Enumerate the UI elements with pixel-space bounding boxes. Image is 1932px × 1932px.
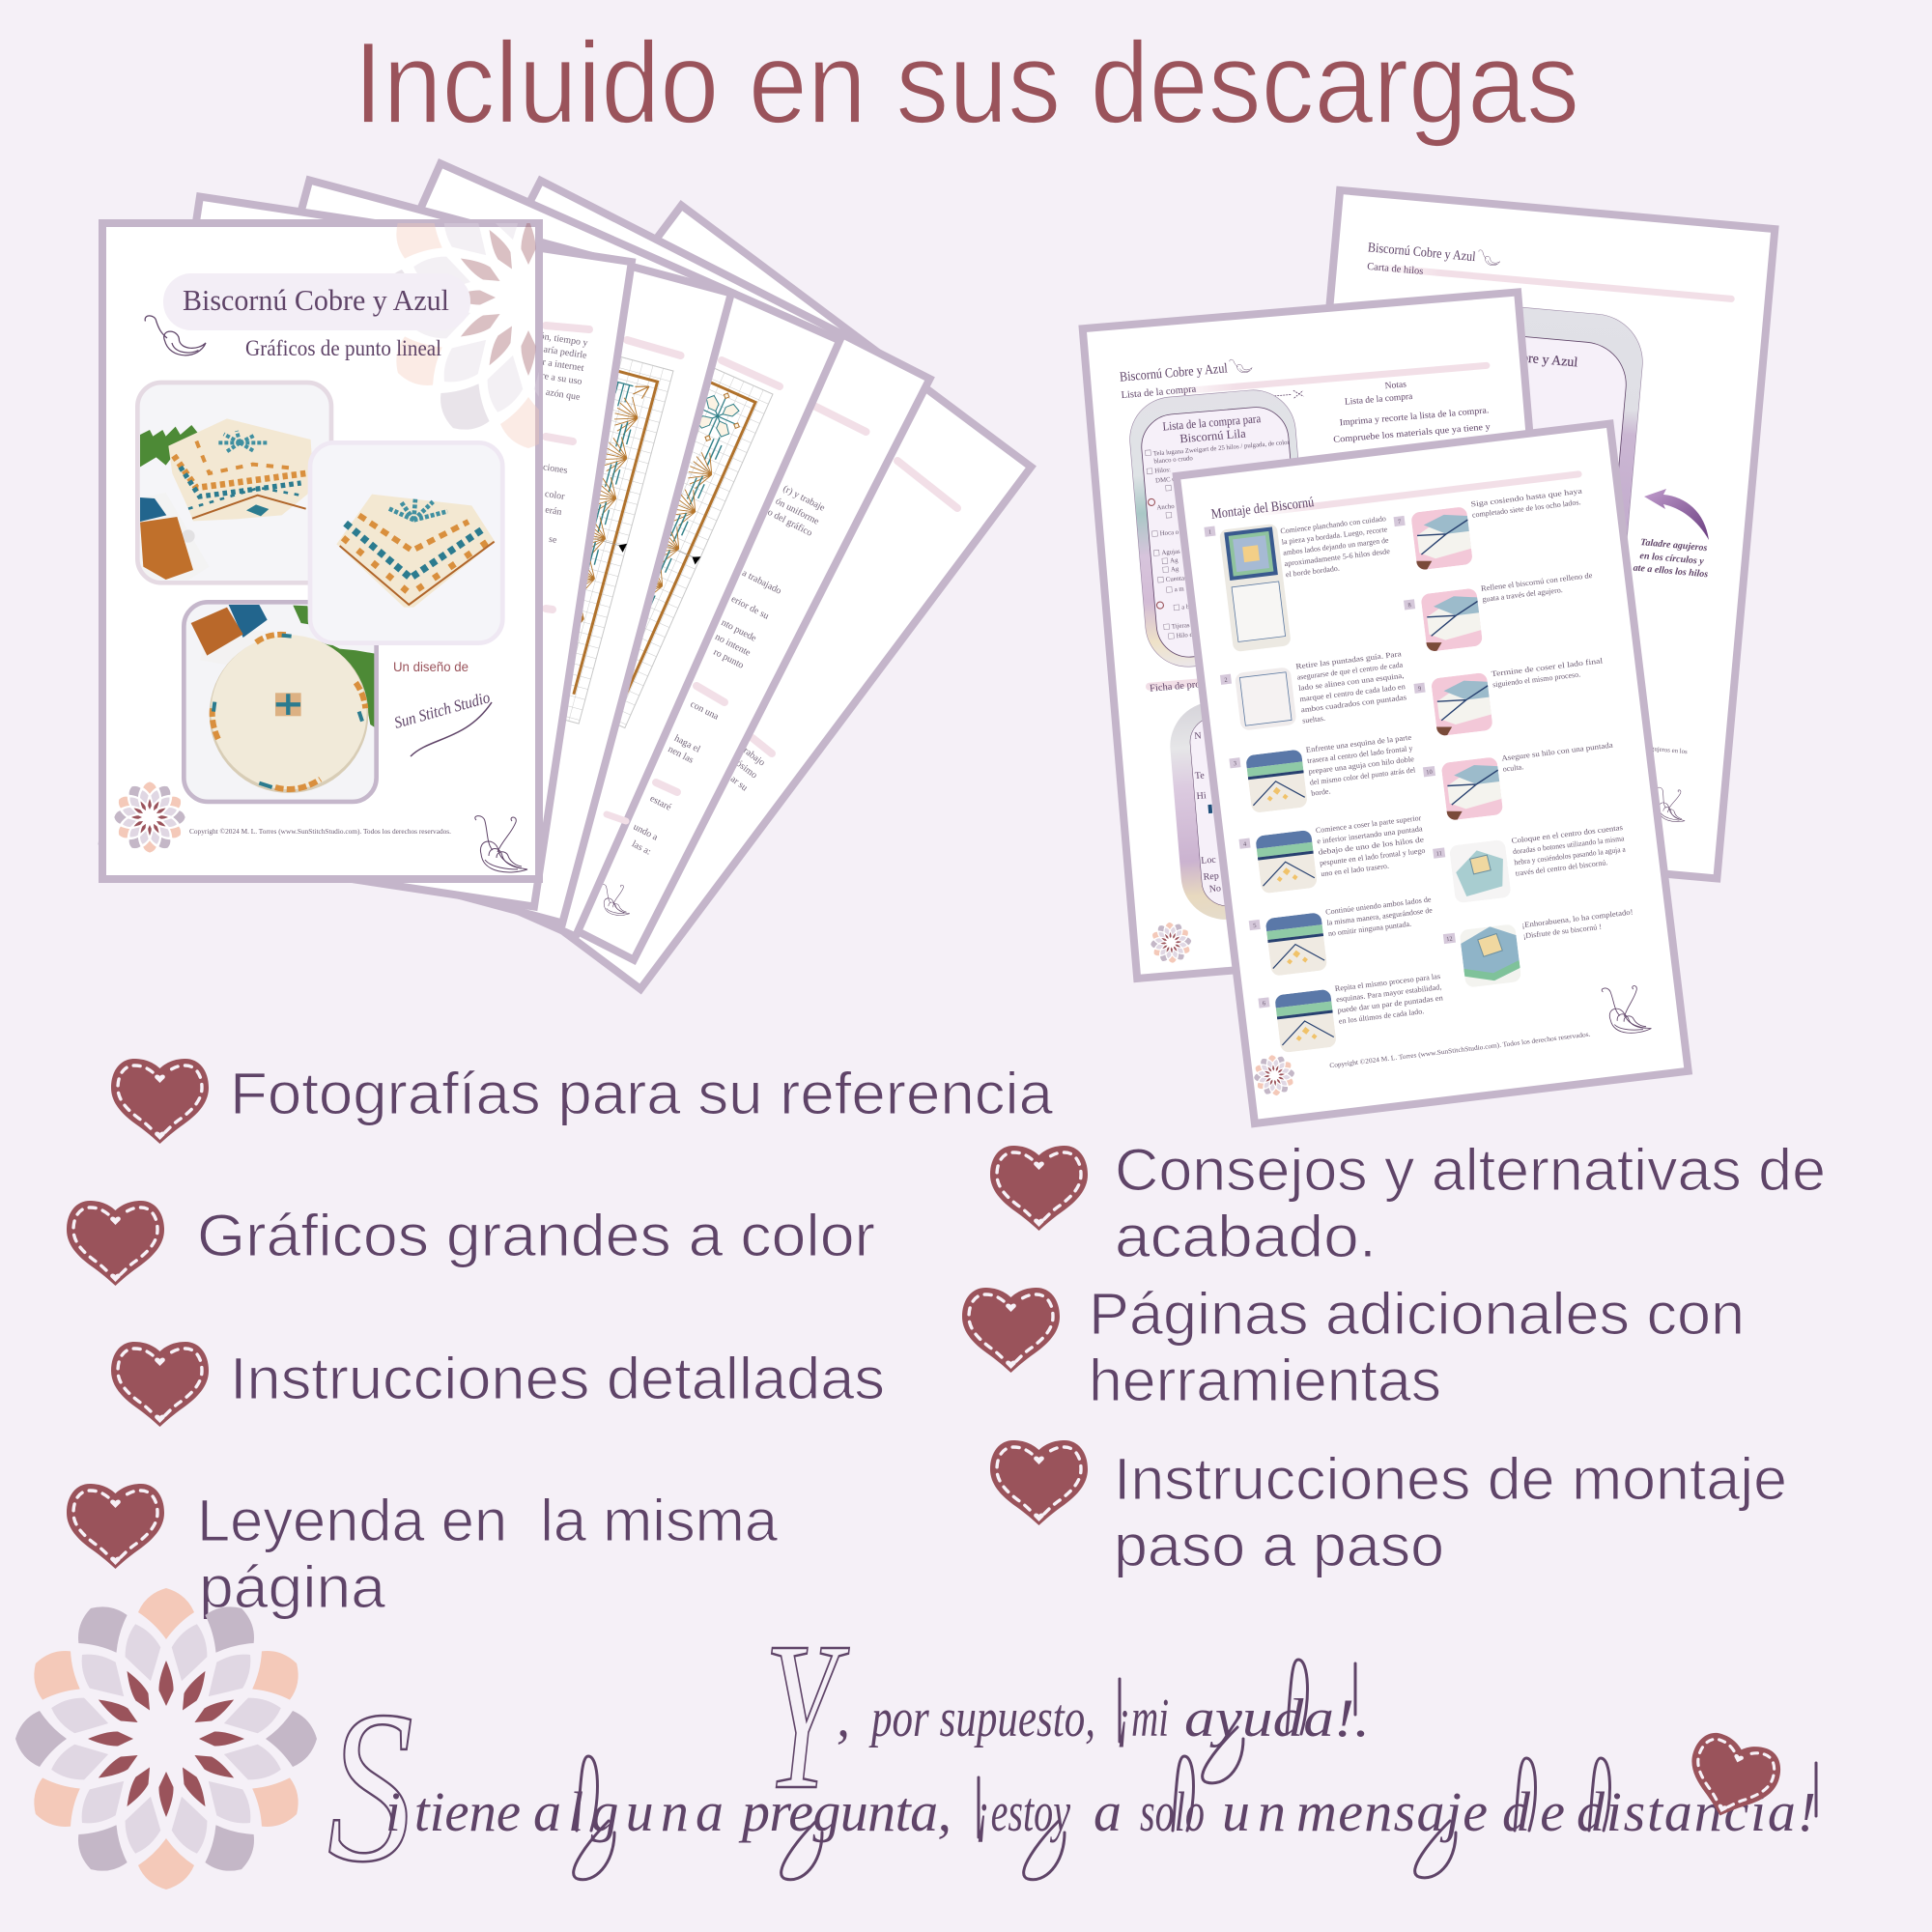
- bullet: gráficos: Gráficos grandes a color: [197, 1203, 875, 1268]
- step 6: 6: [1263, 1000, 1266, 1008]
- shopping card: [1126, 386, 1315, 670]
- step 8: guata a través del agujero.: [1482, 585, 1563, 604]
- step 11: hebra y cosiéndolos pasando la aguja a: [1514, 844, 1627, 867]
- bullet: fotografías: [111, 1059, 1053, 1144]
- decorative calligraphic flourishes: [574, 1660, 1816, 1880]
- notes: Compruebe los materials que ya tiene y: [1333, 422, 1491, 445]
- step 11: doradas o botones utilizando la misma: [1513, 834, 1625, 856]
- page B: fan text page: estaré: [648, 793, 673, 813]
- icon: feather: [1230, 357, 1252, 374]
- bullet: leyenda: [67, 1484, 778, 1620]
- step 2: 2: [1224, 677, 1228, 684]
- page title: Biscornú Cobre y Azul: [1367, 241, 1476, 265]
- step 8: 8: [1407, 602, 1411, 610]
- line 1: ayuda!.: [1184, 1689, 1370, 1748]
- step 6: Repita el mismo proceso para las: [1334, 972, 1441, 993]
- step 1: Comience planchando con cuidado: [1280, 514, 1386, 535]
- line 2: un: [1222, 1780, 1286, 1843]
- step 5: no omitir ninguna puntada.: [1327, 920, 1411, 938]
- pink rule: [1255, 470, 1582, 517]
- page B: fan text page: o del gráfico: [766, 507, 814, 539]
- page B: fan text page: [244, 181, 929, 960]
- step 3: del mismo color del punto atrás del: [1309, 765, 1416, 787]
- step 8: Rellene el biscornú con relleno de: [1481, 571, 1593, 593]
- bullet: montaje: paso a paso: [1114, 1513, 1444, 1578]
- photo 2: biscornu pentagon: [310, 442, 502, 643]
- bullet: páginas: herramientas: [1089, 1348, 1441, 1413]
- icon: feather: [1478, 250, 1501, 266]
- fanned pages group: [102, 147, 1031, 989]
- copyright: Copyright ©2024 M. L. Torres (www.SunStitchStudio.com). Todos los derechos reservados.: [1329, 1031, 1591, 1069]
- shopping card: Biscornú Lila: [1179, 426, 1247, 445]
- page E: text page: color: [544, 489, 566, 502]
- step 8: [1403, 571, 1600, 654]
- small mandala: [114, 781, 185, 853]
- step 3: 3: [1234, 760, 1237, 767]
- step 11: Coloque en el centro dos cuentas: [1511, 823, 1623, 845]
- step 6: puede dar un par de puntadas en: [1337, 993, 1443, 1014]
- line 2: pregunta,: [738, 1780, 952, 1843]
- shopping card: Agujas: [1161, 549, 1180, 556]
- arrow note text: [1633, 537, 1711, 580]
- step 12: [1442, 907, 1639, 990]
- step 11: través del centro del biscornú.: [1515, 858, 1608, 878]
- shopping card: Hilos:: [1154, 467, 1171, 475]
- step 2: sueltas.: [1302, 714, 1325, 725]
- snowflake motif: [685, 384, 750, 451]
- step 7: [1393, 487, 1590, 573]
- project sheet card: Rep: [1203, 870, 1219, 883]
- page B: fan text page: las a:: [630, 838, 653, 858]
- bullet: gráficos: [67, 1201, 875, 1286]
- step 3: trasera al centro del lado frontal y: [1307, 744, 1413, 765]
- line 2: distancia!: [1577, 1780, 1816, 1843]
- line 2: i tiene: [385, 1780, 521, 1843]
- page subtitle: Carta de hilos: [1367, 262, 1424, 277]
- bullet: consejos: [990, 1137, 1826, 1269]
- step 6: en los últimos de cada lado.: [1338, 1007, 1425, 1026]
- shopping card: blanco o crudo: [1153, 455, 1194, 466]
- page E: text page: ón, tiempo y: [539, 331, 588, 349]
- project sheet card: Te: [1194, 770, 1206, 781]
- chart C: [536, 355, 773, 728]
- bullet: montaje: Instrucciones de montaje: [1114, 1446, 1787, 1512]
- step 12: ¡Enhorabuena, lo ha completado!: [1521, 907, 1634, 929]
- page E: text page: cciones: [538, 462, 568, 476]
- step 11: [1433, 823, 1630, 905]
- step 7: Siga cosiendo hasta que haya: [1470, 487, 1583, 508]
- shopping card: a bo: [1181, 604, 1194, 611]
- script message: [327, 1598, 1816, 1907]
- photo group: [137, 383, 502, 802]
- step 12: ¡Disfrute de su biscornú !: [1522, 923, 1602, 941]
- shopping card: Tijeras: [1172, 622, 1190, 631]
- step 2: Retire las puntadas guía. Para: [1295, 649, 1403, 670]
- project sheet card: No: [1208, 883, 1221, 895]
- step 2: ambos cuadrados con puntadas: [1300, 693, 1407, 714]
- line 1: ,: [837, 1686, 850, 1748]
- step 3: [1229, 733, 1419, 815]
- page B: fan text page: haga el: [672, 733, 702, 755]
- designer label: Un diseño de: [393, 659, 469, 674]
- notes: Notas: [1384, 380, 1407, 391]
- project sheet card: Loc: [1201, 855, 1217, 867]
- page A: back of fan: trabajo: [739, 744, 767, 768]
- signature swoosh: [411, 702, 492, 756]
- icon: cover swirl: [475, 816, 527, 872]
- step 2: [1219, 649, 1408, 734]
- step 5: [1248, 895, 1438, 979]
- line 1: ¡mi: [1117, 1689, 1169, 1748]
- page E: text page: se: [548, 534, 558, 546]
- line 1: por supuesto,: [868, 1689, 1095, 1748]
- large mandala: [15, 1588, 317, 1889]
- page D: chart page: [141, 180, 731, 923]
- bullet: instrucciones: [111, 1342, 885, 1427]
- page B: fan text page: a trabajado: [740, 568, 783, 597]
- step 1: 1: [1208, 528, 1212, 536]
- page A: back of fan: ar su: [728, 774, 750, 793]
- bullet: consejos: Consejos y alternativas de: [1115, 1137, 1826, 1203]
- notes: Imprima y recorte la lista de la compra.: [1339, 406, 1490, 428]
- icon: swirl: [1655, 787, 1688, 822]
- shopping card: Cuentas: [1166, 575, 1187, 583]
- step 1: el borde bordado.: [1285, 564, 1340, 579]
- shopping card: DMC o: [1155, 476, 1177, 484]
- bullet: consejos: acabado.: [1115, 1204, 1377, 1269]
- page A: back of fan: [291, 206, 1031, 989]
- pink rule: [1368, 263, 1735, 302]
- line 1: Y: [764, 1598, 849, 1833]
- step 10: oculta.: [1502, 762, 1524, 774]
- line 2: a: [1094, 1780, 1122, 1843]
- faded mandala watermark: [395, 223, 539, 448]
- small mandala: [1252, 1053, 1297, 1098]
- step 10: 10: [1426, 769, 1433, 777]
- pink rule: [1171, 362, 1491, 395]
- bullet: leyenda: página: [199, 1554, 385, 1620]
- page E: text page: re a su uso: [541, 371, 582, 387]
- icon: rotated heart over text: [1677, 1727, 1787, 1830]
- arrow note text: en los círculos y: [1639, 551, 1705, 567]
- cover title: Biscornú Cobre y Azul: [183, 283, 449, 317]
- shopping card: Hilo de: [1176, 632, 1196, 639]
- step 10: Asegure su hilo con una puntada: [1501, 741, 1614, 763]
- photo 1: biscornu with threads: [137, 383, 331, 582]
- page E: text page: erán: [545, 505, 562, 518]
- bullet: leyenda: Leyenda en la misma: [197, 1488, 778, 1553]
- line 2: alguna: [533, 1780, 724, 1843]
- right pages group: [1083, 190, 1775, 1123]
- step 6: [1258, 972, 1447, 1055]
- page R1: thread card: [1282, 190, 1775, 878]
- shopping card: Hoca o: [1159, 529, 1179, 537]
- step 7: 7: [1398, 519, 1403, 526]
- page R3: assembly instructions: [1177, 424, 1689, 1123]
- step 2: asegurarse de que el centro de cada: [1296, 660, 1404, 682]
- step 2: marque el centro de cada lado en: [1299, 682, 1406, 703]
- shopping card: Lista de la compra para: [1162, 412, 1262, 434]
- page B: fan text page: (r) y trabaje: [781, 483, 827, 514]
- step 12: 12: [1446, 936, 1453, 943]
- step 1: [1204, 505, 1400, 654]
- shopping card: Ag: [1171, 566, 1179, 573]
- thread card frame: Biscornú Cobre y Azul: [1453, 345, 1578, 371]
- line 2: [327, 1665, 1816, 1907]
- copyright: Copyright ©2024 M. L. Torres (www.SunStitchStudio.com). Todos los derechos reservados.: [189, 828, 451, 836]
- step 5: 5: [1253, 923, 1257, 929]
- page B: fan text page: con una: [689, 699, 721, 723]
- small mandala: [1149, 921, 1193, 965]
- step 3: borde.: [1311, 786, 1331, 798]
- scissors line: [1271, 389, 1303, 400]
- step 3: Enfrente una esquina de la parte: [1305, 733, 1412, 754]
- project sheet card: [1167, 692, 1352, 923]
- page E: text page: [102, 197, 632, 907]
- page B: fan text page: no intente: [713, 632, 753, 659]
- page B: fan text page: nto puede: [720, 617, 758, 644]
- line 2: de: [1502, 1780, 1565, 1843]
- step 4: e inferior insertando una puntada: [1317, 824, 1424, 845]
- page E: text page: aría pedirle: [543, 344, 588, 361]
- step 1: la pieza ya bordada. Luego, recorte: [1281, 525, 1388, 547]
- line 2: mensaje: [1296, 1780, 1488, 1843]
- page B: fan text page: nen las: [667, 744, 696, 766]
- step 9: [1413, 656, 1610, 739]
- line 2: solo: [1140, 1780, 1205, 1843]
- signature: Sun Stitch Studio: [392, 688, 492, 732]
- project sheet card: Hi: [1196, 790, 1207, 802]
- project sheet card: N: [1194, 730, 1202, 742]
- cover subtitle: Gráficos de punto lineal: [245, 336, 441, 360]
- step 10: [1422, 741, 1620, 823]
- page R2: shopping list: [1083, 292, 1573, 979]
- page C: chart page with snowflake: [177, 163, 839, 937]
- step 11: 11: [1435, 850, 1442, 858]
- notes: Lista de la compra: [1345, 392, 1413, 408]
- bullet: páginas: Páginas adicionales con: [1089, 1281, 1745, 1347]
- subtitle: Lista de la compra: [1121, 384, 1197, 401]
- project sheet subtitle: Ficha de pro: [1150, 679, 1201, 695]
- chart D: [486, 346, 673, 724]
- step 9: siguiendo el mismo proceso.: [1492, 669, 1581, 689]
- page B: fan text page: erior de su: [729, 594, 771, 622]
- cover page: [99, 219, 543, 883]
- shopping card: a m: [1174, 585, 1185, 593]
- shopping card: Ag: [1170, 557, 1179, 565]
- step 6: esquinas. Para mayor estabilidad,: [1336, 982, 1442, 1004]
- bullet: páginas: [962, 1281, 1745, 1413]
- bullet: instrucciones: Instrucciones detalladas: [230, 1346, 885, 1411]
- step 5: la misma manera, asegurándose de: [1326, 906, 1434, 927]
- step 9: Termine de coser el lado final: [1491, 656, 1604, 678]
- notes: [1329, 373, 1491, 445]
- title: Incluido en sus descargas: [354, 18, 1579, 148]
- step 4: pespunte en el lado frontal y luego: [1320, 846, 1426, 867]
- page B: fan text page: ón uniforme: [774, 497, 821, 527]
- bullet: montaje: [990, 1440, 1787, 1578]
- line 1: [764, 1598, 1370, 1833]
- arrow note text: ate a ellos los hilos: [1633, 562, 1709, 580]
- arrow: [1644, 489, 1709, 540]
- icon: cover feather: [145, 316, 206, 355]
- step 1: ambos lados dejando un margen de: [1283, 536, 1389, 557]
- step 2: lado se alinea con una esquina,: [1298, 671, 1405, 693]
- page E: text page: r a internet: [542, 357, 584, 374]
- icon: swirl: [1602, 983, 1652, 1037]
- thread card frame: [1406, 299, 1647, 626]
- step 3: prepare una aguja con hilo doble: [1308, 754, 1415, 776]
- page E: text page: azón que: [545, 387, 582, 403]
- page B: fan text page: undo a: [632, 822, 660, 843]
- line 2: ¡estoy: [976, 1780, 1070, 1843]
- shopping card: Ancho: [1156, 503, 1175, 511]
- step 5: Continúe uniendo ambos lados de: [1325, 895, 1432, 917]
- line 2: S: [327, 1665, 413, 1907]
- bullet list: [67, 1059, 1826, 1620]
- cover title pill: [163, 273, 470, 330]
- step 4: [1238, 813, 1429, 895]
- step 4: 4: [1243, 840, 1247, 848]
- bullet: fotografías: Fotografías para su referencia: [230, 1061, 1053, 1126]
- step 4: debajo de uno de los hilos de: [1318, 835, 1425, 857]
- arrow note text: Taladre agujeros: [1640, 537, 1708, 554]
- step 7: completado siete de los ocho lados.: [1471, 497, 1581, 520]
- step 1: aproximadamente 5-6 hilos desde: [1284, 547, 1391, 568]
- step 4: uno en el lado trasero.: [1321, 862, 1389, 878]
- shopping card: Tela lugana Zweigart de 25 hilos / pulgada, de color: [1153, 440, 1291, 458]
- page heading: Montaje del Biscornú: [1210, 495, 1315, 523]
- step 9: 9: [1418, 686, 1422, 693]
- page B: fan text page: ro punto: [712, 647, 746, 671]
- page title: Biscornú Cobre y Azul: [1119, 361, 1228, 385]
- photo 3: cushion back: [184, 602, 377, 802]
- page A: back of fan: ósimo: [734, 758, 759, 781]
- fragment text: gujeros en los: [1651, 746, 1688, 755]
- step 4: Comience a coser la parte superior: [1315, 813, 1422, 835]
